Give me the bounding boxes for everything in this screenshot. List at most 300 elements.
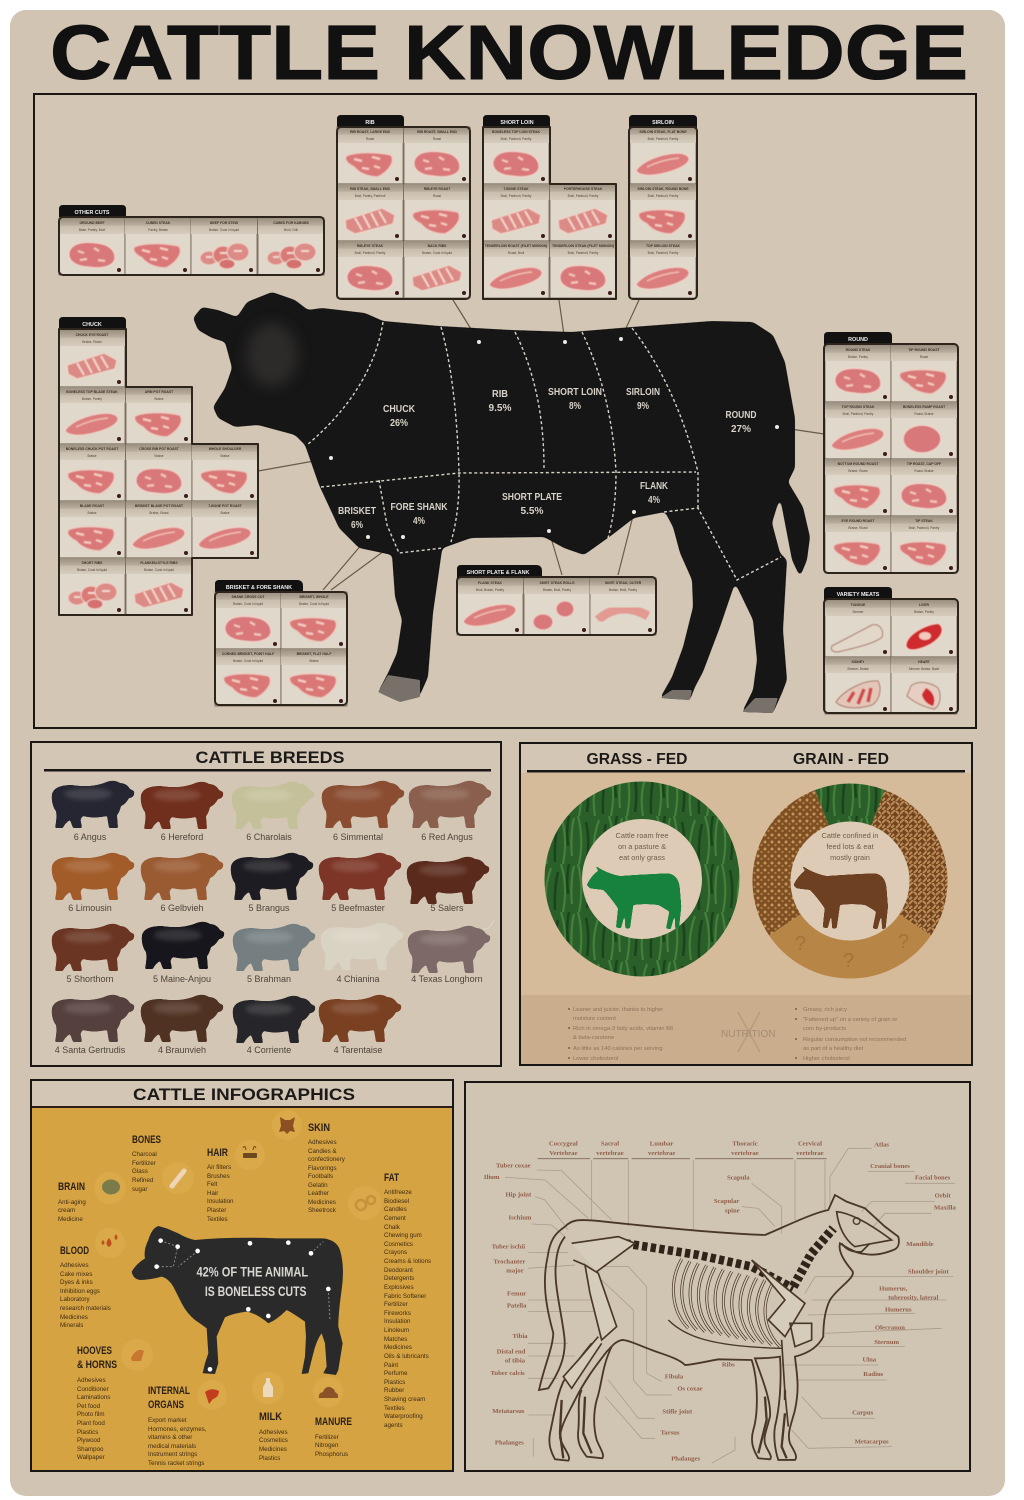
list: fat: Insulation	[384, 1318, 411, 1325]
cell: liver: LIVER	[919, 603, 930, 607]
list: fat: Matches	[384, 1336, 407, 1343]
list: hooves and horns: & HORNS	[77, 1359, 117, 1371]
skeleton labels: Hip joint	[505, 1192, 532, 1199]
list: internal organs: Export market	[148, 1417, 187, 1424]
icon: bones	[162, 1162, 194, 1194]
breed: Hereford	[141, 782, 223, 842]
skeleton labels: Tuber calcis	[491, 1370, 525, 1377]
cell: flank steak	[457, 578, 523, 635]
cell: whole shoulder: WHOLE SHOULDER	[209, 447, 242, 451]
list: fat: Deodorant	[384, 1267, 413, 1274]
cell: top round steak: Broil, Panbroil, Panfry	[843, 412, 874, 416]
list: hooves and horns: Adhesives	[77, 1377, 106, 1384]
cell: tenderloin steak: Broil, Panbroil, Panfry	[568, 251, 599, 255]
list: fat: Rubber	[384, 1387, 404, 1394]
list: grain-fed nutrition	[795, 1007, 906, 1062]
list: blood: BLOOD	[60, 1245, 89, 1257]
skeleton labels: vertebrae	[648, 1150, 675, 1157]
cell: skirt steak outer	[590, 578, 656, 635]
list: blood	[60, 1245, 111, 1329]
breed: Maine-Anjou: 5 Maine-Anjou	[153, 974, 211, 984]
cell: cubes for kabobs: CUBES FOR KABOBS	[273, 221, 310, 225]
cell: top blade steak: BONELESS TOP BLADE STEAK	[66, 390, 118, 394]
skeleton labels: Ischium	[509, 1215, 532, 1222]
cut labels: BRISKET	[338, 505, 376, 517]
skeleton labels: Tuber ischii	[492, 1243, 525, 1250]
cell: round steak	[825, 345, 891, 402]
cell: eye round roast	[825, 516, 891, 573]
cell: back ribs: Braise, Cook in liquid	[422, 251, 452, 255]
cell: flanken-style ribs: FLANKEN-STYLE RIBS	[140, 561, 178, 565]
list: hooves and horns	[77, 1345, 117, 1461]
list: manure: Fertilizer	[315, 1434, 339, 1441]
list: hair: Hair	[207, 1190, 218, 1197]
panel: grass-fed vs grain-fed	[520, 743, 972, 1065]
grain mystery marks: ?	[898, 931, 909, 953]
list: fat: agents	[384, 1422, 403, 1429]
cut labels: 9.5%	[488, 402, 512, 414]
cell: beef for stew: Braise, Cook in liquid	[209, 228, 239, 232]
list: hooves and horns: Conditioner	[77, 1386, 109, 1393]
far hind leg	[578, 1347, 612, 1458]
cell: arm pot roast	[126, 387, 192, 444]
leader dots	[329, 337, 779, 539]
skeleton labels: Cervical	[798, 1141, 822, 1148]
cut box: variety meats: VARIETY MEATS	[837, 592, 880, 598]
cell: arm pot roast: Braise	[154, 397, 164, 401]
cell: rib-eye roast	[404, 184, 470, 241]
skeleton labels: Ulna	[862, 1356, 877, 1363]
list: grain-fed nutrition: corn by-products	[803, 1026, 846, 1032]
list: bones: Glass	[132, 1168, 148, 1175]
grain mystery marks	[795, 931, 909, 972]
cut labels: SHORT LOIN	[548, 386, 602, 398]
cell: ground beef: Bake, Panfry, Broil	[79, 228, 105, 232]
skeleton labels: Cranial bones	[870, 1163, 910, 1170]
list: hooves and horns: Pet food	[77, 1403, 101, 1410]
cut box: other cuts	[59, 205, 324, 275]
cell: tenderloin roast: Roast, Broil	[508, 251, 525, 255]
cut box: sirloin: SIRLOIN	[652, 120, 674, 126]
list: hooves and horns: Photo film	[77, 1411, 105, 1418]
breed: Beefmaster	[319, 853, 401, 913]
breed: Charolais	[232, 782, 314, 842]
cut box: round	[824, 332, 958, 573]
cell: liver: Braise, Panfry	[914, 610, 934, 614]
cell: cross rib pot roast: Braise	[154, 454, 164, 458]
list: milk	[259, 1411, 288, 1462]
cell: cubes for kabobs: Broil, Grill	[284, 228, 298, 232]
skeleton labels: Sacral	[601, 1141, 619, 1148]
list: hair	[207, 1147, 234, 1223]
list: fat: Oils & lubricants	[384, 1353, 429, 1360]
cell: boneless chuck pot roast: Braise	[87, 454, 97, 458]
heading: cattle infographics: CATTLE INFOGRAPHICS	[133, 1086, 355, 1104]
list: hooves and horns: Laminations	[77, 1394, 110, 1401]
list: blood: research materials	[60, 1305, 111, 1312]
cell: back ribs: BACK RIBS	[428, 244, 447, 248]
cut labels: CHUCK	[383, 403, 415, 415]
breed: Tarentaise	[319, 995, 401, 1055]
cell: t-bone steak	[483, 184, 549, 241]
list: fat: Paint	[384, 1362, 398, 1369]
list: fat: Chalk	[384, 1224, 401, 1231]
list: fat: Chewing gum	[384, 1232, 422, 1239]
list: bones: Charcoal	[132, 1151, 157, 1158]
skeleton labels: Scapular	[714, 1198, 739, 1205]
breed: Santa Gertrudis: 4 Santa Gertrudis	[55, 1045, 126, 1055]
skeleton labels: Olecranon	[875, 1324, 905, 1331]
cell: tenderloin steak: TENDERLOIN STEAK (FILET MIGNON)	[552, 244, 614, 248]
cell: kidney: KIDNEY	[852, 660, 865, 664]
list: grass-fed nutrition: As little as 140 calories per serving	[573, 1046, 663, 1052]
breed: Santa Gertrudis	[52, 995, 134, 1055]
breed: Maine-Anjou	[142, 922, 224, 984]
cell: brisket flat half	[281, 649, 347, 706]
cell: cubed steak: Panfry, Braise	[148, 228, 168, 232]
cut box: brisket and fore shank	[215, 580, 347, 706]
list: internal organs: Instrument strings	[148, 1451, 197, 1458]
breed: Corriente: 4 Corriente	[247, 1045, 291, 1055]
list: bones: Fertilizer	[132, 1160, 156, 1167]
cell: t-bone steak: Broil, Panbroil, Panfry	[501, 194, 532, 198]
list: blood: Inhibition eggs	[60, 1288, 100, 1295]
list: skin: SKIN	[308, 1122, 330, 1134]
cell: rib steak: Broil, Panfry, Panbroil	[355, 194, 386, 198]
cell: tongue: TONGUE	[851, 603, 866, 607]
cell: beef for stew	[191, 218, 257, 275]
list: fat: FAT	[384, 1172, 399, 1184]
cell: 7-bone pot roast: Braise	[220, 511, 230, 515]
cell: cubed steak	[125, 218, 191, 275]
list: internal organs: medical materials	[148, 1443, 196, 1450]
cut labels: 26%	[390, 417, 409, 429]
list: skin: Footballs	[308, 1173, 333, 1180]
cut box: rib	[337, 115, 470, 299]
grain mystery marks: ?	[843, 950, 854, 972]
breed: Red Angus: 6 Red Angus	[421, 832, 473, 842]
cut labels: FORE SHANK	[390, 501, 448, 513]
breed: Brangus: 5 Brangus	[248, 903, 290, 913]
cell: porterhouse steak: PORTERHOUSE STEAK	[564, 187, 603, 191]
cell: rib roast small end: RIB ROAST, SMALL END	[417, 130, 457, 134]
cell: ground beef: GROUND BEEF	[79, 221, 105, 225]
list: hooves and horns: Plant food	[77, 1420, 105, 1427]
cell: tip roast cap off: TIP ROAST, CAP OFF	[907, 462, 941, 466]
cell: tongue	[825, 600, 891, 657]
list: skin: Leather	[308, 1190, 329, 1197]
skeleton labels: Stifle joint	[662, 1409, 693, 1416]
list: skin	[308, 1122, 346, 1214]
list: fat: Linoleum	[384, 1327, 409, 1334]
text: grass-fed description: Cattle roam free	[616, 831, 668, 840]
skeleton labels	[484, 1141, 957, 1463]
cell: brisket blade pot roast: BRISKET BLADE POT ROAST	[135, 504, 184, 508]
list: milk: MILK	[259, 1411, 282, 1423]
list: skin: Candies &	[308, 1148, 337, 1155]
cell: sirloin steak round bone	[630, 184, 696, 241]
callout: 42% boneless: IS BONELESS CUTS	[205, 1283, 306, 1299]
cell: kidney: Simmer, Braise	[847, 667, 869, 671]
list: blood: Dyes & inks	[60, 1279, 93, 1286]
cell: short ribs: SHORT RIBS	[82, 561, 103, 565]
cell: tenderloin roast	[483, 241, 549, 298]
skeleton labels: Sternum	[874, 1339, 899, 1346]
cell: rib steak	[337, 184, 403, 241]
icon: manure	[313, 1377, 343, 1407]
cut box: rib: RIB	[365, 120, 375, 126]
breed: Texas Longhorn	[408, 920, 494, 984]
skeleton labels: Scapula	[727, 1174, 750, 1181]
breed: Salers	[407, 857, 489, 913]
list: hair: Plaster	[207, 1207, 226, 1214]
breed: Limousin: 6 Limousin	[68, 903, 112, 913]
cell: chuck eye roast: Braise, Roast	[82, 340, 102, 344]
cell: boneless chuck pot roast	[59, 444, 125, 501]
list: bones: BONES	[132, 1134, 161, 1146]
text: grass-fed description: on a pasture &	[618, 842, 666, 851]
cell: corned brisket: Braise, Cook in liquid	[233, 659, 263, 663]
list: skin: Adhesives	[308, 1139, 337, 1146]
cell: tenderloin steak	[550, 241, 616, 298]
cut labels: ROUND	[726, 409, 757, 421]
cell: rib roast large end: Roast	[366, 137, 374, 141]
skeleton labels: Mandible	[906, 1241, 934, 1248]
cell: top loin steak	[483, 127, 549, 184]
cell: top sirloin steak: TOP SIRLOIN STEAK	[646, 244, 681, 248]
list: fat: Perfume	[384, 1370, 408, 1377]
breed: Chianina	[321, 923, 403, 984]
boneless cow silhouette	[132, 1226, 343, 1375]
cell: rib-eye roast: Roast	[433, 194, 441, 198]
skeleton labels: Shoulder joint	[908, 1268, 949, 1275]
skeleton labels: Femur	[507, 1291, 526, 1298]
list: milk: Medicines	[259, 1446, 287, 1453]
skeleton labels: Phalanges	[495, 1439, 524, 1446]
breed: Gelbvieh	[141, 853, 223, 913]
skeleton labels: vertebrae	[796, 1150, 824, 1157]
cell: rump roast	[891, 402, 957, 459]
breed: Gelbvieh: 6 Gelbvieh	[160, 903, 204, 913]
breed: Charolais: 6 Charolais	[246, 832, 292, 842]
list: bones: sugar	[132, 1186, 147, 1193]
list: blood: Medicines	[60, 1314, 88, 1321]
breed: Simmental	[322, 781, 404, 842]
list: fat: Cosmetics	[384, 1241, 413, 1248]
list: fat: Medicines	[384, 1344, 412, 1351]
cell: blade roast	[59, 501, 125, 558]
cut labels: 4%	[648, 494, 661, 506]
cell: rib steak: RIB STEAK, SMALL END	[350, 187, 390, 191]
list: grain-fed nutrition: "Fattened up" on a variety of grain or	[803, 1017, 897, 1023]
heading: grain-fed: GRAIN - FED	[793, 751, 889, 768]
pelvis and femur	[563, 1237, 635, 1388]
cell: sirloin steak round bone: SIRLOIN STEAK, ROUND BONE	[637, 187, 689, 191]
list: internal organs: ORGANS	[148, 1399, 184, 1411]
list: bones	[132, 1134, 161, 1193]
cell: kidney	[825, 657, 891, 714]
list: grass-fed nutrition	[568, 1007, 673, 1062]
cell: tip steak	[891, 516, 957, 573]
list: blood: Laboratory	[60, 1296, 90, 1303]
breed: Red Angus	[409, 781, 491, 842]
icon: hair	[235, 1140, 265, 1170]
skeleton labels: Humerus,	[879, 1285, 908, 1292]
cell: bottom round roast: BOTTOM ROUND ROAST	[838, 462, 879, 466]
text: grass-fed description: eat only grass	[619, 853, 665, 862]
skeleton labels: Os coxae	[677, 1386, 703, 1393]
list: skin: Flavorings	[308, 1165, 337, 1172]
icon: fat	[348, 1186, 382, 1220]
list: manure: MANURE	[315, 1416, 352, 1428]
cut box: brisket and fore shank: BRISKET & FORE SHANK	[226, 585, 292, 591]
skeleton labels: Patella	[507, 1303, 527, 1310]
cell: chuck eye roast	[59, 330, 125, 387]
cell: skirt steak outer: Braise, Broil, Panfry	[609, 588, 637, 592]
skeleton labels: spine	[725, 1207, 740, 1214]
cell: t-bone steak: T-BONE STEAK	[503, 187, 529, 191]
cell: rump roast: Roast, Braise	[914, 412, 934, 416]
list: fat: Antifreeze	[384, 1189, 412, 1196]
cell: top blade steak: Braise, Panfry	[82, 397, 102, 401]
cell: brisket blade pot roast: Braise, Roast	[149, 511, 169, 515]
skeleton labels: Carpus	[852, 1409, 874, 1416]
cell: liver	[891, 600, 957, 657]
list: fat: Explosives	[384, 1284, 414, 1291]
cut box: other cuts: OTHER CUTS	[74, 210, 110, 216]
cell: tip roast cap off: Roast, Braise	[914, 469, 934, 473]
cell: shank cross cut	[215, 592, 281, 649]
cell: cross rib pot roast: CROSS RIB POT ROAST	[139, 447, 180, 451]
cut box: variety meats	[824, 587, 958, 714]
skeleton labels: Distal end	[497, 1348, 526, 1355]
breed: Brangus	[231, 853, 313, 913]
cell: sirloin steak flat bone: SIRLOIN STEAK, FLAT BONE	[639, 130, 687, 134]
list: hair: HAIR	[207, 1147, 228, 1159]
skeleton labels: Facial bones	[915, 1175, 951, 1182]
list: fat: Candles	[384, 1206, 407, 1213]
cut labels: SHORT PLATE	[502, 491, 562, 503]
breed: Simmental: 6 Simmental	[333, 832, 383, 842]
cell: whole shoulder	[192, 444, 258, 501]
cell: heart: HEART	[918, 660, 931, 664]
cell: blade roast: BLADE ROAST	[80, 504, 105, 508]
cell: beef for stew: BEEF FOR STEW	[210, 221, 239, 225]
list: hooves and horns: Plastics	[77, 1429, 98, 1436]
cell: brisket whole: BRISKET, WHOLE	[299, 595, 329, 599]
list: blood: Minerals	[60, 1322, 83, 1329]
skeleton labels: Trochanter	[493, 1258, 525, 1265]
list: internal organs: vitamins & other	[148, 1434, 192, 1441]
skeleton labels: Maxilla	[934, 1204, 957, 1211]
list: manure	[315, 1416, 352, 1458]
icon: skin	[272, 1110, 302, 1140]
list: fat: Fertilizer	[384, 1301, 408, 1308]
list: fat: Biodiesel	[384, 1198, 409, 1205]
text: grain-fed description: Cattle confined in	[821, 831, 879, 840]
heading: cattle breeds: CATTLE BREEDS	[196, 748, 344, 767]
cell: heart: Simmer, Braise, Bake	[909, 667, 940, 671]
skeleton labels: Fibula	[665, 1373, 684, 1380]
list: internal organs	[148, 1385, 207, 1467]
icon: hooves and horns	[121, 1339, 153, 1371]
cut labels	[338, 386, 757, 531]
list: brain: Medicine	[58, 1216, 83, 1223]
cell: top blade steak	[59, 387, 125, 444]
list: fat: Crayons	[384, 1249, 407, 1256]
skeleton labels: Tuber coxae	[496, 1163, 531, 1170]
list: grain-fed nutrition: Higher cholesterol	[803, 1056, 850, 1062]
cell: heart	[891, 657, 957, 714]
cut labels: FLANK	[640, 480, 668, 492]
leader lines from cow to cut boxes	[258, 300, 824, 590]
breed: Salers: 5 Salers	[430, 903, 464, 913]
text: grass-fed description	[616, 831, 668, 862]
list: brain: Anti-aging	[58, 1199, 86, 1206]
breed: Beefmaster: 5 Beefmaster	[331, 903, 385, 913]
cell: bottom round roast	[825, 459, 891, 516]
skeleton labels: tuberosity, lateral	[888, 1294, 939, 1301]
skeleton labels: Humerus	[885, 1307, 912, 1314]
skeleton labels: Vertebrae	[549, 1150, 577, 1157]
cell: top sirloin steak: Broil, Panbroil, Panfry	[648, 251, 679, 255]
cell: corned brisket: CORNED BRISKET, POINT HALF	[222, 652, 274, 656]
cell: short ribs	[59, 558, 125, 615]
cell: rib-eye steak	[337, 241, 403, 298]
list: hooves and horns: HOOVES	[77, 1345, 112, 1357]
breed: Hereford: 6 Hereford	[161, 832, 203, 842]
cell: skirt steak rolls	[524, 578, 590, 635]
cell: brisket blade pot roast	[126, 501, 192, 558]
list: hair: Textiles	[207, 1216, 228, 1223]
skeleton labels: Metatarsus	[492, 1408, 525, 1415]
heading: grass-fed: GRASS - FED	[586, 751, 688, 768]
grass ring diagram	[564, 800, 720, 958]
callout: 42% boneless: 42% OF THE ANIMAL	[196, 1264, 308, 1280]
cell: skirt steak rolls: SKIRT STEAK ROLLS	[539, 581, 575, 585]
list: manure: Phosphorus	[315, 1451, 348, 1458]
cell: skirt steak outer: SKIRT STEAK, OUTER	[605, 581, 642, 585]
breed: Limousin	[52, 853, 134, 913]
list: internal organs: Hormones, enzymes,	[148, 1426, 207, 1433]
list: hair: Insulation	[207, 1198, 234, 1205]
cell: sirloin steak round bone: Broil, Panbroil, Panfry	[648, 194, 679, 198]
list: fat: Fireworks	[384, 1310, 411, 1317]
list: fat: Waterproofing	[384, 1413, 423, 1420]
text: grain-fed description: mostly grain	[830, 853, 870, 862]
breed: Tarentaise: 4 Tarentaise	[334, 1045, 382, 1055]
skeleton labels: Thoracic	[732, 1141, 758, 1148]
rib cage	[668, 1259, 782, 1348]
list: brain	[58, 1181, 86, 1223]
icon: internal organs	[197, 1380, 227, 1410]
icon: green cow	[587, 865, 681, 929]
cut labels: 4%	[413, 515, 426, 527]
breed: Angus: 6 Angus	[74, 832, 107, 842]
cell: arm pot roast: ARM POT ROAST	[145, 390, 174, 394]
list: fat: Fabric Softener	[384, 1293, 426, 1300]
list: grass-fed nutrition: & beta-carotene	[573, 1035, 614, 1041]
vertebrae rules	[538, 1157, 827, 1160]
list: grain-fed nutrition: as part of a healthy diet	[803, 1046, 864, 1052]
cell: eye round roast: Braise, Roast	[848, 526, 868, 530]
cell: rib roast small end: Roast	[433, 137, 441, 141]
skeleton labels: Tibia	[512, 1333, 528, 1340]
shoulder and foreleg bones	[752, 1260, 812, 1427]
cell: porterhouse steak	[550, 184, 616, 241]
list: internal organs: Tennis racket strings	[148, 1460, 204, 1467]
cell: tip roast cap off	[891, 459, 957, 516]
